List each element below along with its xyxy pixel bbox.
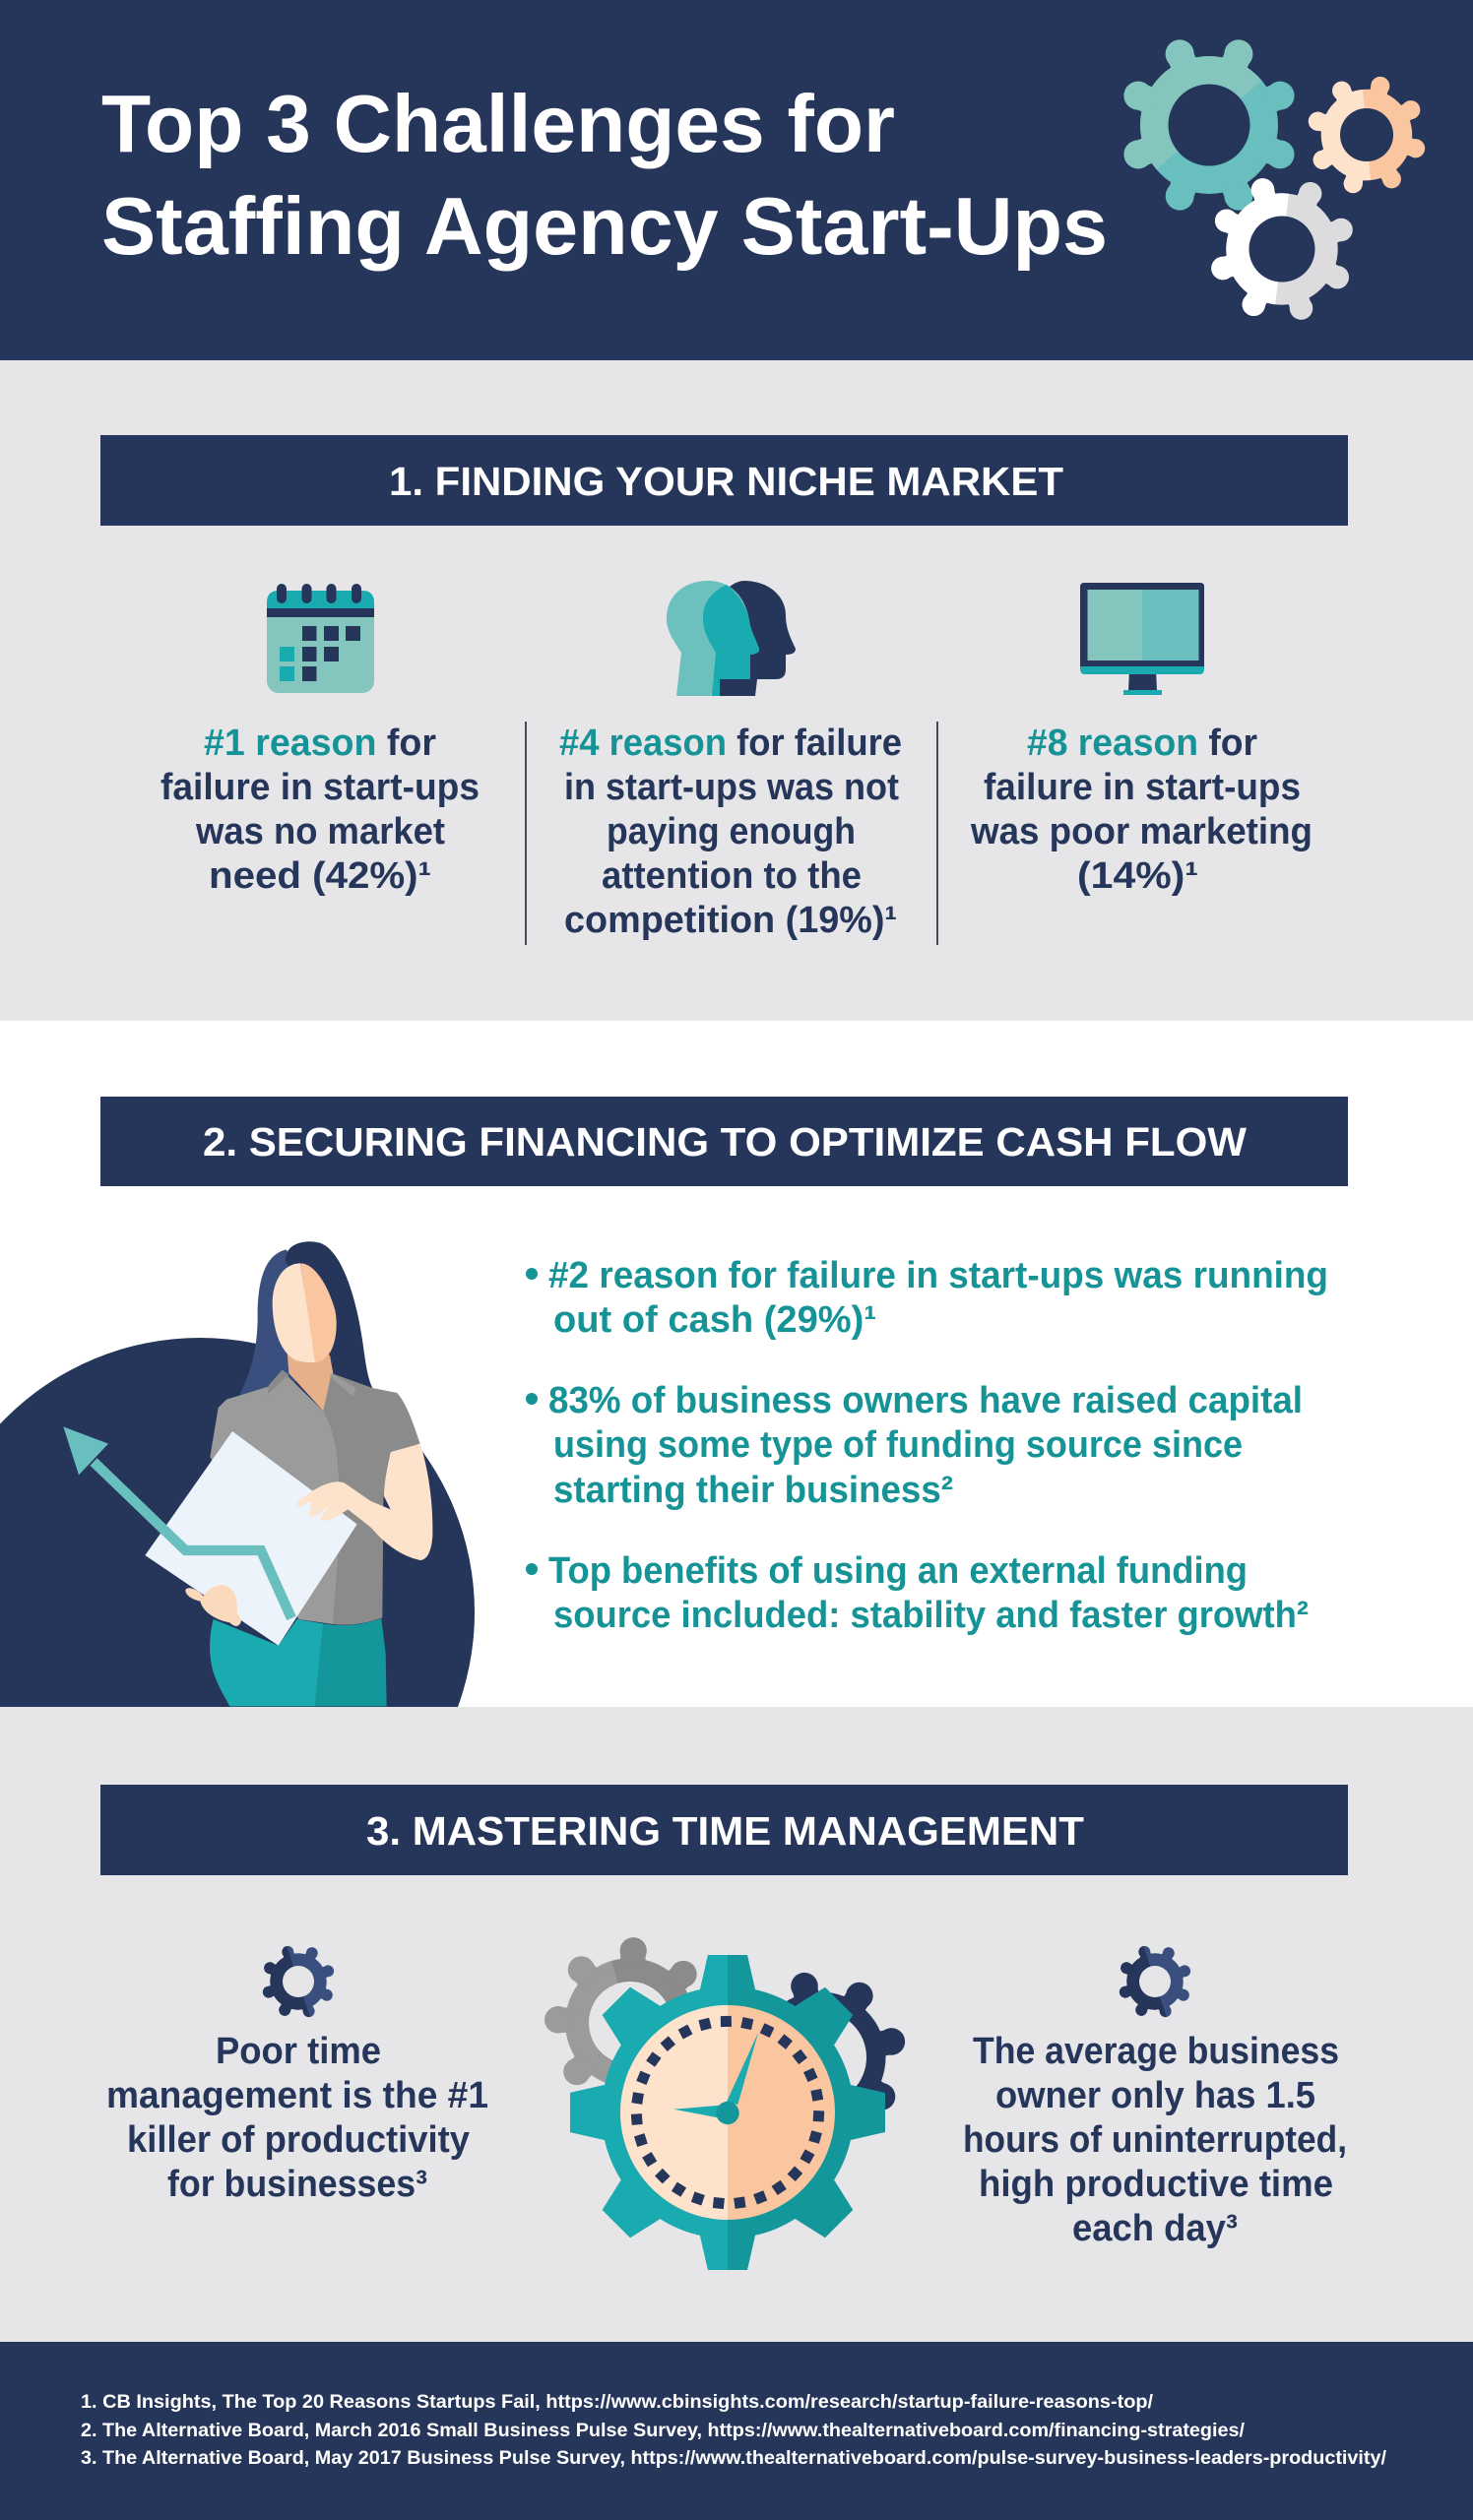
text block: time management left	[106, 2031, 488, 2205]
heading: section 3	[100, 1785, 1348, 1875]
text block: reason 8: was poor marketing	[970, 811, 1313, 852]
title: Top 3 Challenges for	[101, 78, 895, 169]
footnotes: 2. The Alternative Board, March 2016 Small Business Pulse Survey, https://www.thealternativeboard.com/financing-strategies/	[81, 2421, 1246, 2441]
clock face	[620, 2005, 835, 2220]
text block: time management right: owner only has 1.5	[995, 2075, 1315, 2116]
text block: reason 8: #8 reason for	[1027, 723, 1257, 764]
text block: time management left: killer of productivity	[127, 2119, 470, 2161]
bullet 2	[526, 1380, 1303, 1511]
text block: time management right: each day³	[1072, 2208, 1238, 2249]
footnotes: 1. CB Insights, The Top 20 Reasons Startups Fail, https://www.cbinsights.com/research/startup-failure-reasons-top/	[81, 2392, 1154, 2413]
text block: section 2 bullet points	[526, 1255, 1328, 1636]
icon: overlapping heads	[667, 581, 796, 696]
text block: reason 4: attention to the	[602, 855, 862, 897]
divider	[936, 722, 938, 945]
text block: reason 4: in start-ups was not	[564, 767, 899, 808]
woman figure	[63, 1241, 432, 1706]
navy gear	[722, 1959, 919, 2156]
bullet 3	[526, 1550, 1309, 1636]
main teal gear	[570, 1955, 885, 2270]
text block: reason 1: #1 reason for	[204, 723, 436, 764]
divider	[525, 722, 527, 945]
title: Staffing Agency Start-Ups	[101, 180, 1108, 272]
icon: peach gear	[1308, 77, 1426, 193]
panel: header band	[0, 0, 1473, 360]
icon: header gears	[1123, 39, 1426, 320]
text block: time management right: hours of uninterrupted,	[963, 2119, 1347, 2161]
panel: section 3 background	[0, 1707, 1473, 2342]
heading: section 1: 1. FINDING YOUR NICHE MARKET	[389, 459, 1063, 504]
heading: section 1	[100, 435, 1348, 526]
panel: footer band	[0, 2342, 1473, 2520]
illustration: woman holding chart	[0, 1241, 475, 1707]
icon: teal gear	[1123, 39, 1295, 211]
heading: section 3: 3. MASTERING TIME MANAGEMENT	[366, 1808, 1084, 1854]
text block: reason 8: failure in start-ups	[984, 767, 1301, 808]
bullet 2: 83% of business owners have raised capital	[548, 1380, 1303, 1421]
bullet 1	[526, 1255, 1328, 1341]
icon: desktop monitor	[1080, 583, 1204, 695]
footnotes	[81, 2392, 1387, 2469]
text block: reason 4: #4 reason for failure	[559, 723, 902, 764]
heading: section 2	[100, 1097, 1348, 1186]
text block: time management right: The average business	[973, 2031, 1339, 2072]
text block: time management right: high productive time	[979, 2164, 1333, 2205]
clock hands	[673, 2033, 758, 2124]
panel: section 1 background	[0, 360, 1473, 1021]
text block: reason 4: competition (19%)¹	[564, 900, 897, 941]
text block: reason 8: (14%)¹	[1077, 855, 1198, 897]
text block: reason 4: paying enough	[607, 811, 856, 852]
text block: reason 1	[160, 723, 480, 897]
footnotes: 3. The Alternative Board, May 2017 Business Pulse Survey, https://www.thealternativeboard.com/pulse-survey-business-leaders-productivity/	[81, 2448, 1387, 2469]
bullet 3: Top benefits of using an external funding	[548, 1550, 1248, 1592]
gray gear	[544, 1937, 697, 2085]
text block: time management left: for businesses³	[167, 2164, 427, 2205]
text block: reason 1: failure in start-ups	[160, 767, 480, 808]
text block: reason 4	[559, 723, 902, 941]
text block: reason 1: was no market	[195, 811, 445, 852]
title	[101, 78, 1108, 272]
text block: time management left: management is the #1	[106, 2075, 488, 2116]
icon: small gear right	[1119, 1945, 1191, 2018]
panel: section 2 background	[0, 1021, 1473, 1707]
icon: clock gear	[544, 1937, 906, 2270]
text block: time management left: Poor time	[216, 2031, 381, 2072]
bullet 2: using some type of funding source since	[553, 1424, 1243, 1466]
bullet 3: source included: stability and faster growth²	[553, 1595, 1309, 1636]
bullet 1: #2 reason for failure in start-ups was running	[548, 1255, 1328, 1296]
icon: white gear	[1211, 178, 1353, 320]
text block: time management right	[963, 2031, 1347, 2249]
text block: reason 1: need (42%)¹	[209, 855, 431, 897]
icon: calendar	[267, 584, 374, 693]
bullet 1: out of cash (29%)¹	[553, 1299, 876, 1341]
bullet 2: starting their business²	[553, 1470, 953, 1511]
background circle	[0, 1338, 475, 1707]
icon: small gear left	[262, 1945, 335, 2018]
text block: reason 8	[970, 723, 1313, 897]
heading: section 2: 2. SECURING FINANCING TO OPTIMIZE CASH FLOW	[203, 1119, 1247, 1165]
